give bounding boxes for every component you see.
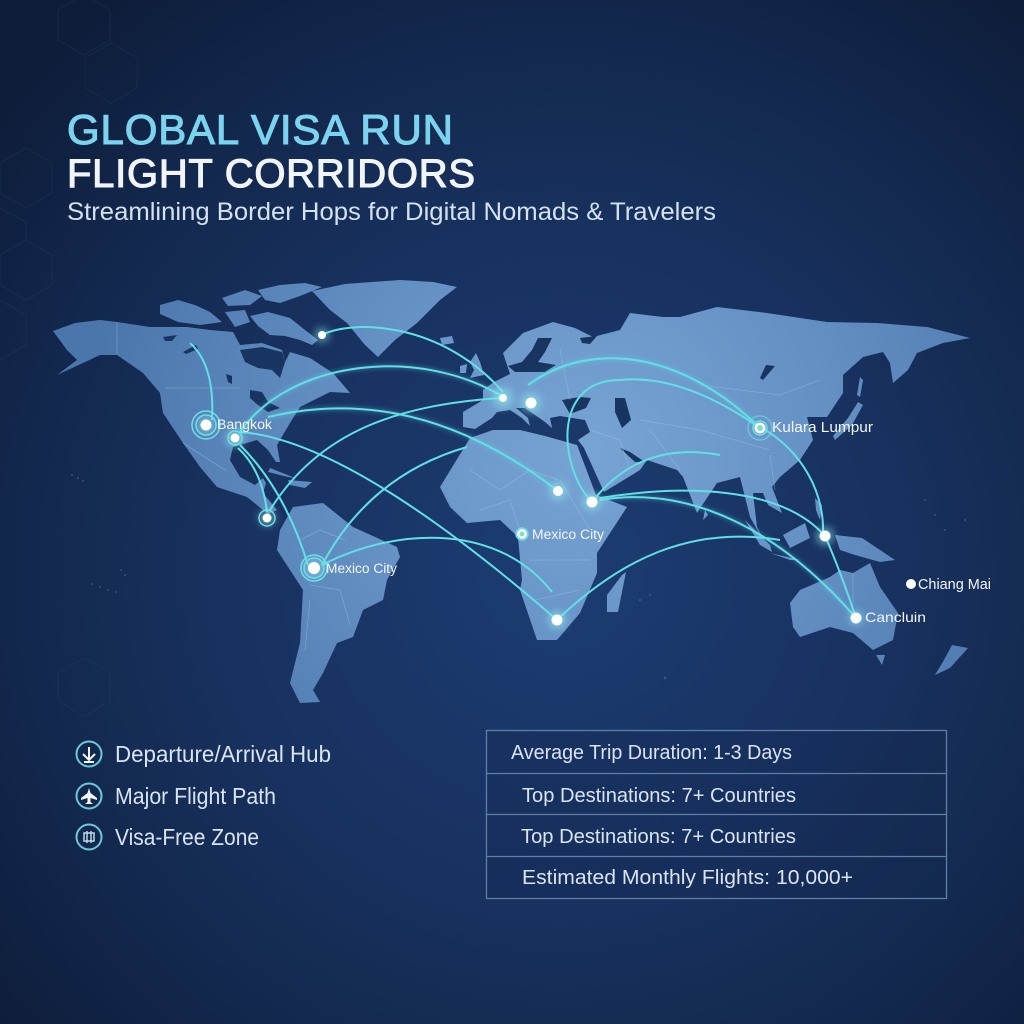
- Greenland: [312, 280, 457, 357]
- hub dots: [200, 331, 916, 626]
- Australia: [790, 563, 898, 650]
- legend item: major flight path: Major Flight Path: [115, 783, 276, 809]
- stat: destinations repeat: Top Destinations: 7+ Countries: [521, 825, 796, 848]
- green hub centres: [520, 425, 763, 536]
- title: FLIGHT CORRIDORS: [67, 152, 475, 196]
- Iceland, UK and Ireland: [440, 336, 484, 378]
- soft glow behind flight paths: [240, 358, 856, 618]
- legend item: visa-free zone: Visa-Free Zone: [115, 824, 259, 850]
- New Guinea: [835, 535, 895, 562]
- city labels: Chiang Mai: [918, 577, 991, 593]
- title: GLOBAL VISA RUN: [67, 106, 453, 153]
- hub glows: [198, 328, 863, 629]
- city labels: [217, 417, 991, 625]
- Caribbean: [268, 468, 312, 488]
- city labels: Mexico City: [326, 561, 397, 576]
- Sumatra, Borneo, Java: [745, 520, 810, 560]
- city labels: Kulara Lumpur: [772, 420, 873, 436]
- hudson bay and lakes: [163, 335, 285, 412]
- title: [67, 106, 475, 196]
- stat: trip duration: Average Trip Duration: 1-3 Days: [511, 741, 792, 764]
- subtitle: Streamlining Border Hops for Digital Nomads & Travelers: [67, 198, 716, 226]
- stat: monthly flights: Estimated Monthly Flights: 10,000+: [522, 866, 853, 889]
- Africa: [440, 430, 627, 640]
- city labels: Cancluin: [865, 609, 926, 625]
- Philippines, Japan, Sakhalin, Sri Lanka: [703, 377, 863, 520]
- decorative hexagons: [0, 0, 137, 716]
- South America: [277, 503, 400, 703]
- flight paths: [190, 327, 856, 620]
- world map: [53, 280, 970, 703]
- Eurasia: [463, 307, 970, 547]
- stat: destinations: Top Destinations: 7+ Countries: [522, 784, 796, 807]
- inland seas: [508, 336, 775, 462]
- stats table: [486, 730, 946, 898]
- legend item: departure/arrival hub: Departure/Arrival Hub: [115, 741, 331, 767]
- Tasmania and New Zealand: [876, 645, 968, 675]
- country borders: [117, 322, 853, 650]
- hub markers: [192, 328, 916, 629]
- city labels: Bangkok: [217, 417, 272, 432]
- faint island dots: [71, 474, 966, 679]
- legend: [76, 741, 331, 850]
- city labels: Mexico City: [532, 527, 604, 542]
- hub rings: [192, 411, 772, 581]
- arctic islands: [160, 283, 322, 345]
- Madagascar: [607, 572, 626, 612]
- continent: North America: [53, 320, 350, 514]
